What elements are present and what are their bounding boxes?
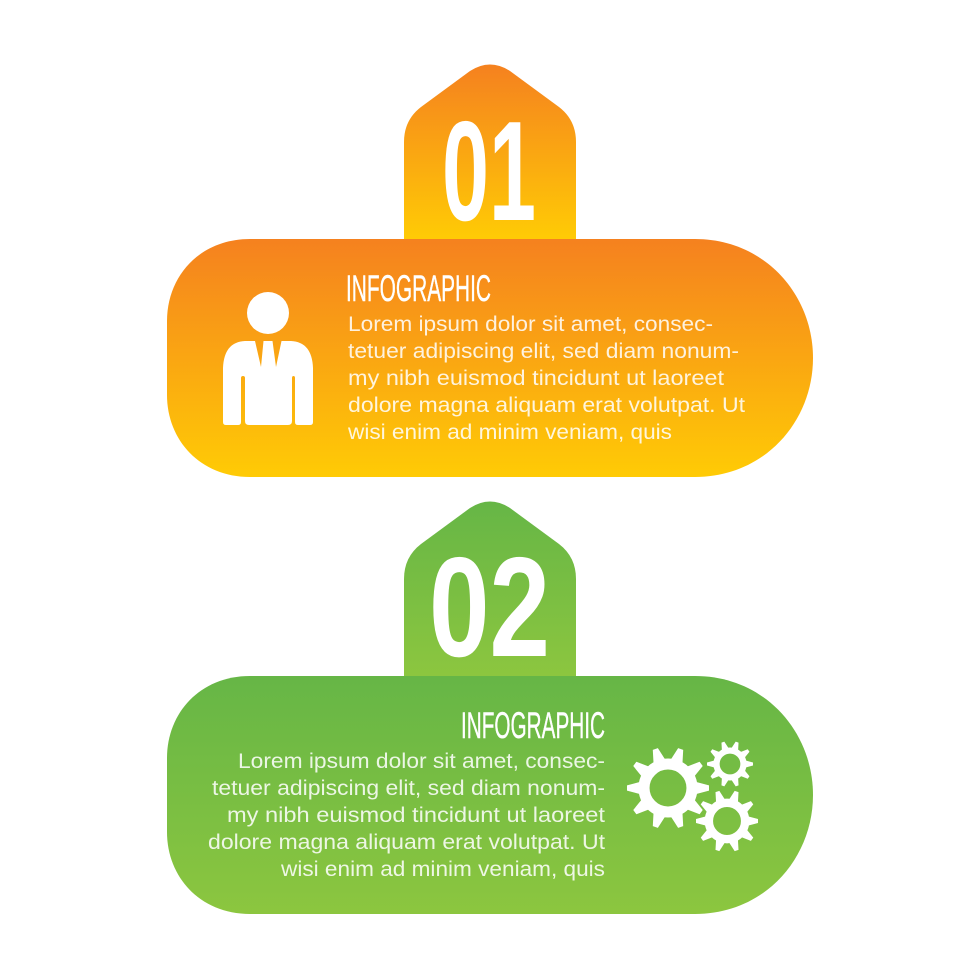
- panel: green: [167, 676, 813, 914]
- gear small: [707, 741, 753, 787]
- tab: 01: [404, 64, 576, 239]
- body text: wisi enim ad minim veniam, quis: [280, 858, 605, 881]
- number 01: 01: [442, 92, 536, 251]
- tab: 02: [404, 502, 576, 676]
- body text: tetuer adipiscing elit, sed diam nonum-: [212, 777, 605, 800]
- body text: my nibh euismod tincidunt ut laoreet: [227, 804, 605, 827]
- step 02: [167, 502, 813, 914]
- body text: my nibh euismod tincidunt ut laoreet: [348, 367, 724, 390]
- body text: dolore magna aliquam erat volutpat. Ut: [348, 394, 745, 417]
- body text: [208, 750, 605, 881]
- body text: wisi enim ad minim veniam, quis: [347, 421, 672, 444]
- body text: Lorem ipsum dolor sit amet, consec-: [348, 313, 713, 336]
- number 02: 02: [429, 528, 550, 687]
- icon: gears: [627, 741, 758, 852]
- body text: tetuer adipiscing elit, sed diam nonum-: [348, 340, 739, 363]
- heading: INFOGRAPHIC: [346, 268, 491, 309]
- step 01: [167, 64, 813, 477]
- body text: [347, 313, 745, 444]
- icon: businessman: [223, 292, 313, 425]
- heading: INFOGRAPHIC: [461, 705, 605, 746]
- gear large: [627, 747, 709, 829]
- body text: Lorem ipsum dolor sit amet, consec-: [238, 750, 605, 773]
- gear medium: [696, 790, 758, 852]
- body text: dolore magna aliquam erat volutpat. Ut: [208, 831, 605, 854]
- panel: orange: [167, 239, 813, 477]
